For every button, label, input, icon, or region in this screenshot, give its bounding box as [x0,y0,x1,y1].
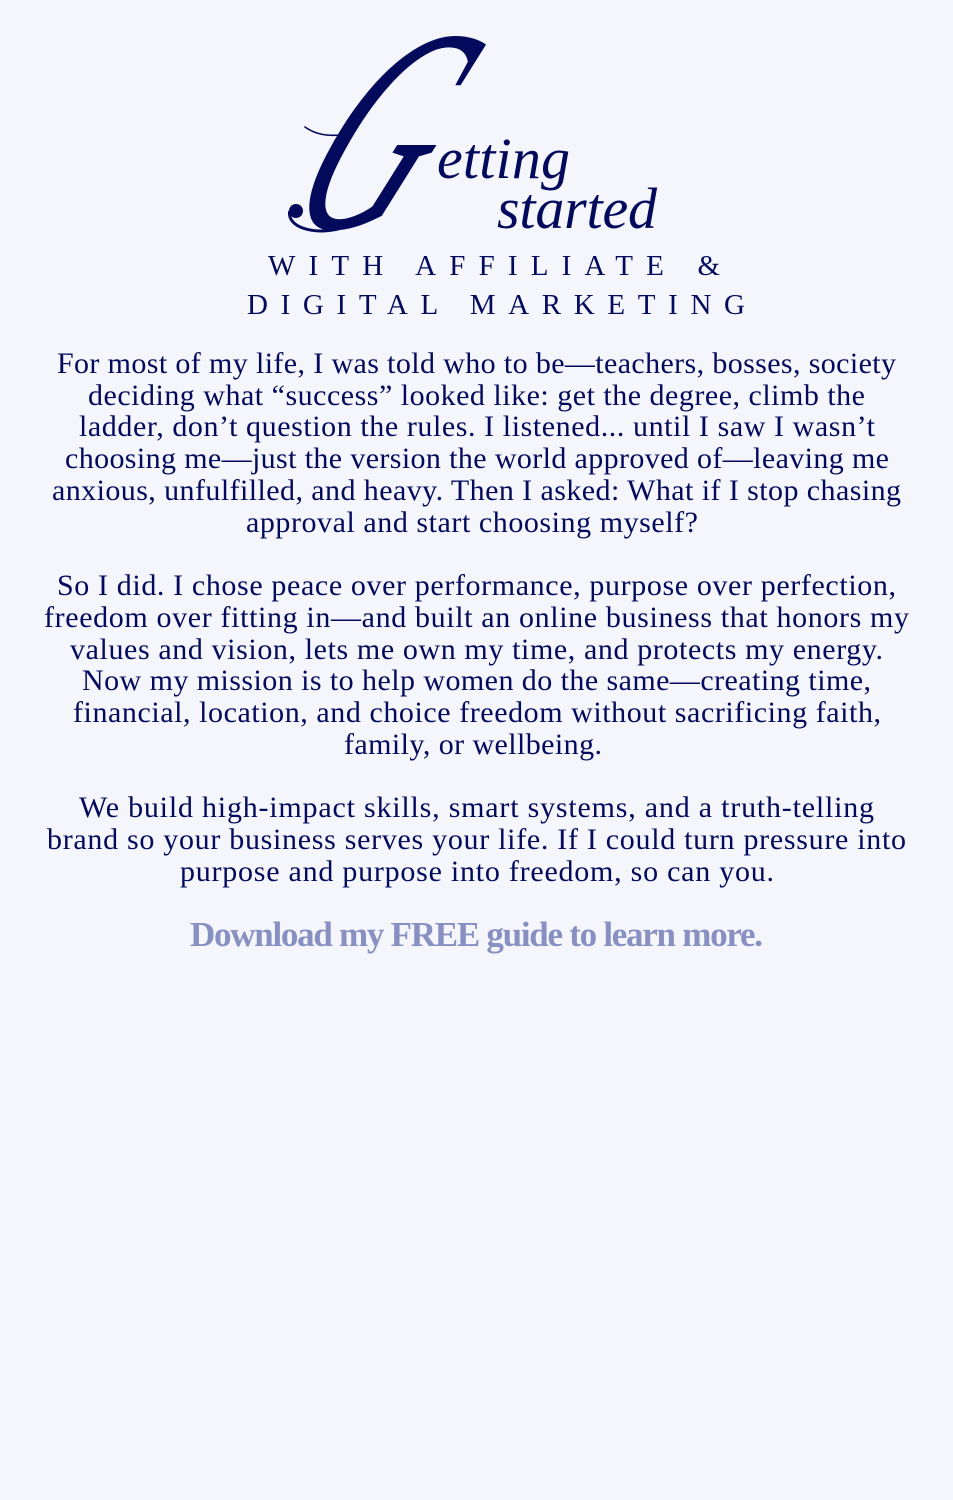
paragraph 1: anxious, unfulfilled, and heavy. Then I asked: What if I stop chasing [52,474,901,507]
paragraph 1: approval and start choosing myself? [246,506,698,539]
subtitle: DIGITAL MARKETING [247,289,745,321]
paragraph 2: freedom over fitting in—and built an online business that honors my [44,601,909,634]
flourish: crossbar swoosh [305,127,341,135]
paragraph 3 [47,791,906,888]
subtitle: WITH AFFILIATE & [268,250,720,282]
title word: etting: etting [437,126,570,191]
paragraph 3: brand so your business serves your life. If I could turn pressure into [47,823,906,856]
paragraph 1: For most of my life, I was told who to be—teachers, bosses, society [57,347,896,380]
paragraph 1: deciding what “success” looked like: get the degree, climb the [88,379,865,412]
paragraph 2: Now my mission is to help women do the same—creating time, [82,664,871,697]
paragraph 3: purpose and purpose into freedom, so can you. [180,855,774,888]
call to action: Download my FREE guide to learn more. [190,915,763,954]
paragraph 2: values and vision, lets me own my time, and protects my energy. [70,633,883,666]
title: Getting started [246,0,658,291]
flourish: tail curl [289,204,338,231]
paragraph 1: ladder, don’t question the rules. I listened... until I saw I wasn’t [79,410,876,443]
paragraph 1 [52,347,901,539]
paragraph 2: financial, location, and choice freedom without sacrificing faith, [73,696,881,729]
paragraph 1: choosing me—just the version the world approved of—leaving me [65,442,889,475]
paragraph 2: family, or wellbeing. [344,728,602,761]
paragraph 2: So I did. I chose peace over performance, purpose over perfection, [57,569,896,602]
subtitle [247,250,745,321]
paragraph 3: We build high-impact skills, smart systems, and a truth-telling [79,791,874,824]
title word: started: started [497,176,658,241]
paragraph 2 [44,569,909,761]
